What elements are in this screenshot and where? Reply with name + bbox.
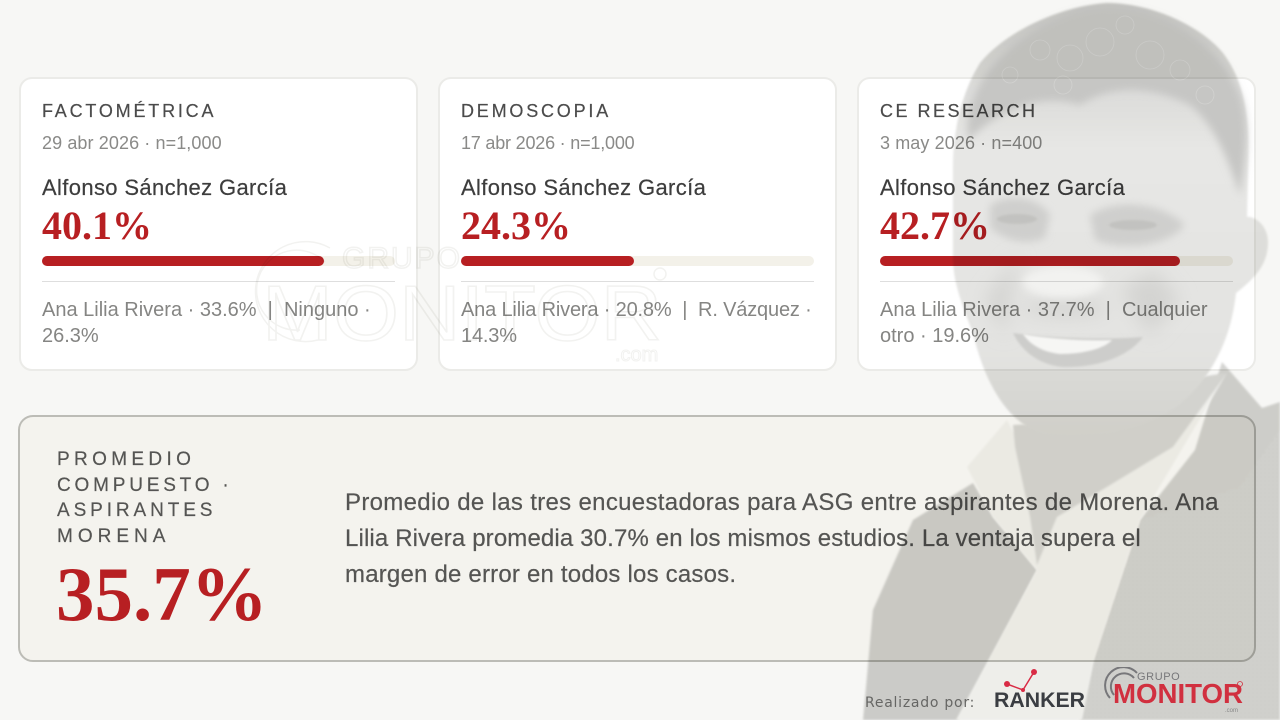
watermark: Grupo Monitor: GRUPO	[342, 242, 462, 275]
average label: PROMEDIO	[57, 449, 195, 470]
percentage: 40.1%	[42, 203, 152, 248]
jacket	[863, 362, 1280, 720]
other candidates	[42, 299, 371, 347]
date and sample: 17 abr 2026 · n=1,000	[461, 133, 634, 153]
logo: Ranker: RANKER	[994, 689, 1085, 712]
average value: 35.7%	[56, 551, 268, 637]
footer credit: Realizado por:	[865, 695, 975, 711]
average description: Lilia Rivera promedia 30.7% en los mismos estudios. La ventaja supera el	[345, 525, 1141, 552]
candidate name: Alfonso Sánchez García	[42, 175, 287, 200]
pollster name: CE RESEARCH	[880, 101, 1038, 121]
other candidates	[461, 299, 812, 347]
shirt and neck	[956, 373, 1227, 720]
cheek and nose shading	[985, 255, 1180, 335]
eyes	[997, 214, 1157, 230]
poll card: Factométrica	[19, 77, 418, 371]
other candidates	[880, 299, 1208, 347]
candidate name: Alfonso Sánchez García	[461, 175, 706, 200]
average label: MORENA	[57, 526, 170, 546]
logo: Grupo Monitor	[1104, 667, 1243, 714]
logo: Grupo Monitor: .com	[1225, 708, 1238, 714]
percentage: 42.7%	[880, 203, 990, 248]
other candidates: Ana Lilia Rivera · 20.8% | R. Vázquez ·	[461, 299, 812, 321]
pollster name: FACTOMÉTRICA	[42, 101, 216, 121]
other candidates: Ana Lilia Rivera · 33.6% | Ninguno ·	[42, 299, 371, 321]
average label: COMPUESTO ·	[57, 474, 233, 496]
head	[953, 3, 1268, 437]
poll card: Demoscopia	[438, 77, 837, 371]
progress bar	[461, 256, 814, 266]
average description: Promedio de las tres encuestadoras para ASG entre aspirantes de Morena. Ana	[345, 489, 1219, 516]
other candidates: 26.3%	[42, 325, 99, 347]
date and sample: 3 may 2026 · n=400	[880, 133, 1042, 153]
progress bar	[42, 256, 395, 266]
other candidates: otro · 19.6%	[880, 325, 989, 347]
average label: ASPIRANTES	[57, 500, 216, 521]
pollster name: DEMOSCOPIA	[461, 101, 611, 121]
progress bar	[880, 256, 1233, 266]
date and sample: 29 abr 2026 · n=1,000	[42, 133, 222, 153]
average description	[345, 489, 1219, 588]
candidate name: Alfonso Sánchez García	[880, 175, 1125, 200]
other candidates: 14.3%	[461, 325, 517, 347]
average description: margen de error en todos los casos.	[345, 561, 736, 588]
poll card: CE Research	[857, 77, 1256, 371]
logo: Grupo Monitor: MONITOR	[1113, 678, 1243, 709]
logo: Ranker	[994, 669, 1085, 712]
percentage: 24.3%	[461, 203, 571, 248]
watermark: Grupo Monitor: .com	[615, 344, 658, 366]
hair	[967, 8, 1246, 195]
panel: composite average	[18, 415, 1256, 662]
watermark: Grupo Monitor: MONITOR	[262, 269, 662, 357]
eye sockets	[990, 198, 1185, 246]
mouth	[1013, 333, 1143, 367]
average label	[57, 449, 233, 546]
other candidates: Ana Lilia Rivera · 37.7% | Cualquier	[880, 299, 1208, 321]
logo: Grupo Monitor: GRUPO	[1137, 671, 1180, 683]
